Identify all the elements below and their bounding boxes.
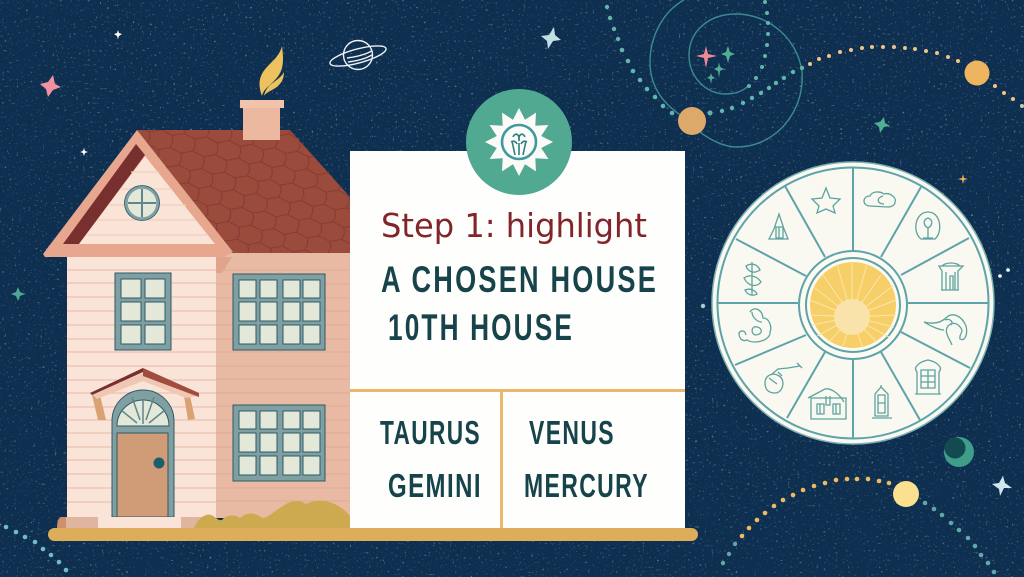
sun at hub — [806, 258, 900, 352]
icon: swan — [924, 315, 967, 345]
stars scattered on sky — [11, 27, 1012, 496]
left wall with siding — [67, 256, 216, 518]
roof with shingles — [137, 130, 350, 253]
planet: Venus: VENUS — [529, 414, 615, 451]
ground line — [48, 528, 698, 541]
heading: step label: Step 1: highlight — [381, 206, 647, 245]
window: upper right — [233, 274, 325, 350]
shrubs — [194, 501, 350, 528]
planet: orange ball on orbit — [678, 107, 706, 135]
chart: zodiac house wheel — [712, 162, 994, 444]
divider: horizontal — [350, 389, 685, 392]
icon: cloud — [864, 192, 895, 207]
door canopy — [90, 368, 199, 420]
icon: curl ornament — [739, 309, 771, 342]
icon: badge with sun — [466, 89, 572, 195]
round attic window — [124, 186, 160, 220]
dotted orbit: teal and orange top right — [605, 0, 1024, 116]
doorstep — [57, 517, 211, 528]
wheel spokes — [718, 167, 988, 438]
icon: lamp in dome — [916, 212, 940, 239]
icon: flowering plant — [744, 262, 761, 295]
planet: pale yellow ball bottom right — [893, 481, 919, 507]
sign: Taurus: TAURUS — [380, 414, 481, 451]
sign: Gemini: GEMINI — [388, 467, 482, 504]
icon: cottage — [808, 389, 846, 419]
icon: narrow tower — [872, 385, 892, 418]
wheel hub — [799, 251, 907, 359]
door with arched fanlight — [112, 390, 174, 517]
subheading: chosen house: A CHOSEN HOUSE — [381, 259, 658, 300]
wheel icons — [739, 188, 967, 419]
roof bracket — [216, 257, 232, 273]
icon: star — [812, 188, 840, 213]
subheading: 10th house: 10TH HOUSE — [388, 307, 574, 348]
illustration: house — [43, 46, 355, 528]
orbit spiral — [650, 0, 802, 147]
divider: vertical — [500, 391, 503, 528]
icon: crescent moon — [944, 437, 974, 467]
chimney — [240, 100, 284, 140]
panel: information card — [350, 151, 685, 528]
window: lower right — [233, 405, 325, 481]
icon: planet with rings — [328, 40, 388, 70]
dotted orbit: bottom left — [4, 525, 68, 572]
icon: banjo — [765, 363, 802, 393]
right wall with brick — [216, 253, 350, 518]
flame above chimney — [260, 46, 284, 96]
icon: small tent tower — [769, 214, 788, 239]
planet: yellow-orange ball top right — [964, 60, 990, 86]
icon: tall house — [915, 360, 941, 394]
sparkle cluster inside orbit — [696, 46, 735, 84]
gable face — [79, 156, 215, 244]
icon: temple — [939, 263, 963, 290]
dotted orbit: bottom right — [721, 477, 996, 574]
window: upper left — [115, 273, 171, 350]
planet: Mercury: MERCURY — [524, 467, 649, 504]
gable trim — [43, 130, 233, 257]
gable shadow — [63, 144, 145, 244]
